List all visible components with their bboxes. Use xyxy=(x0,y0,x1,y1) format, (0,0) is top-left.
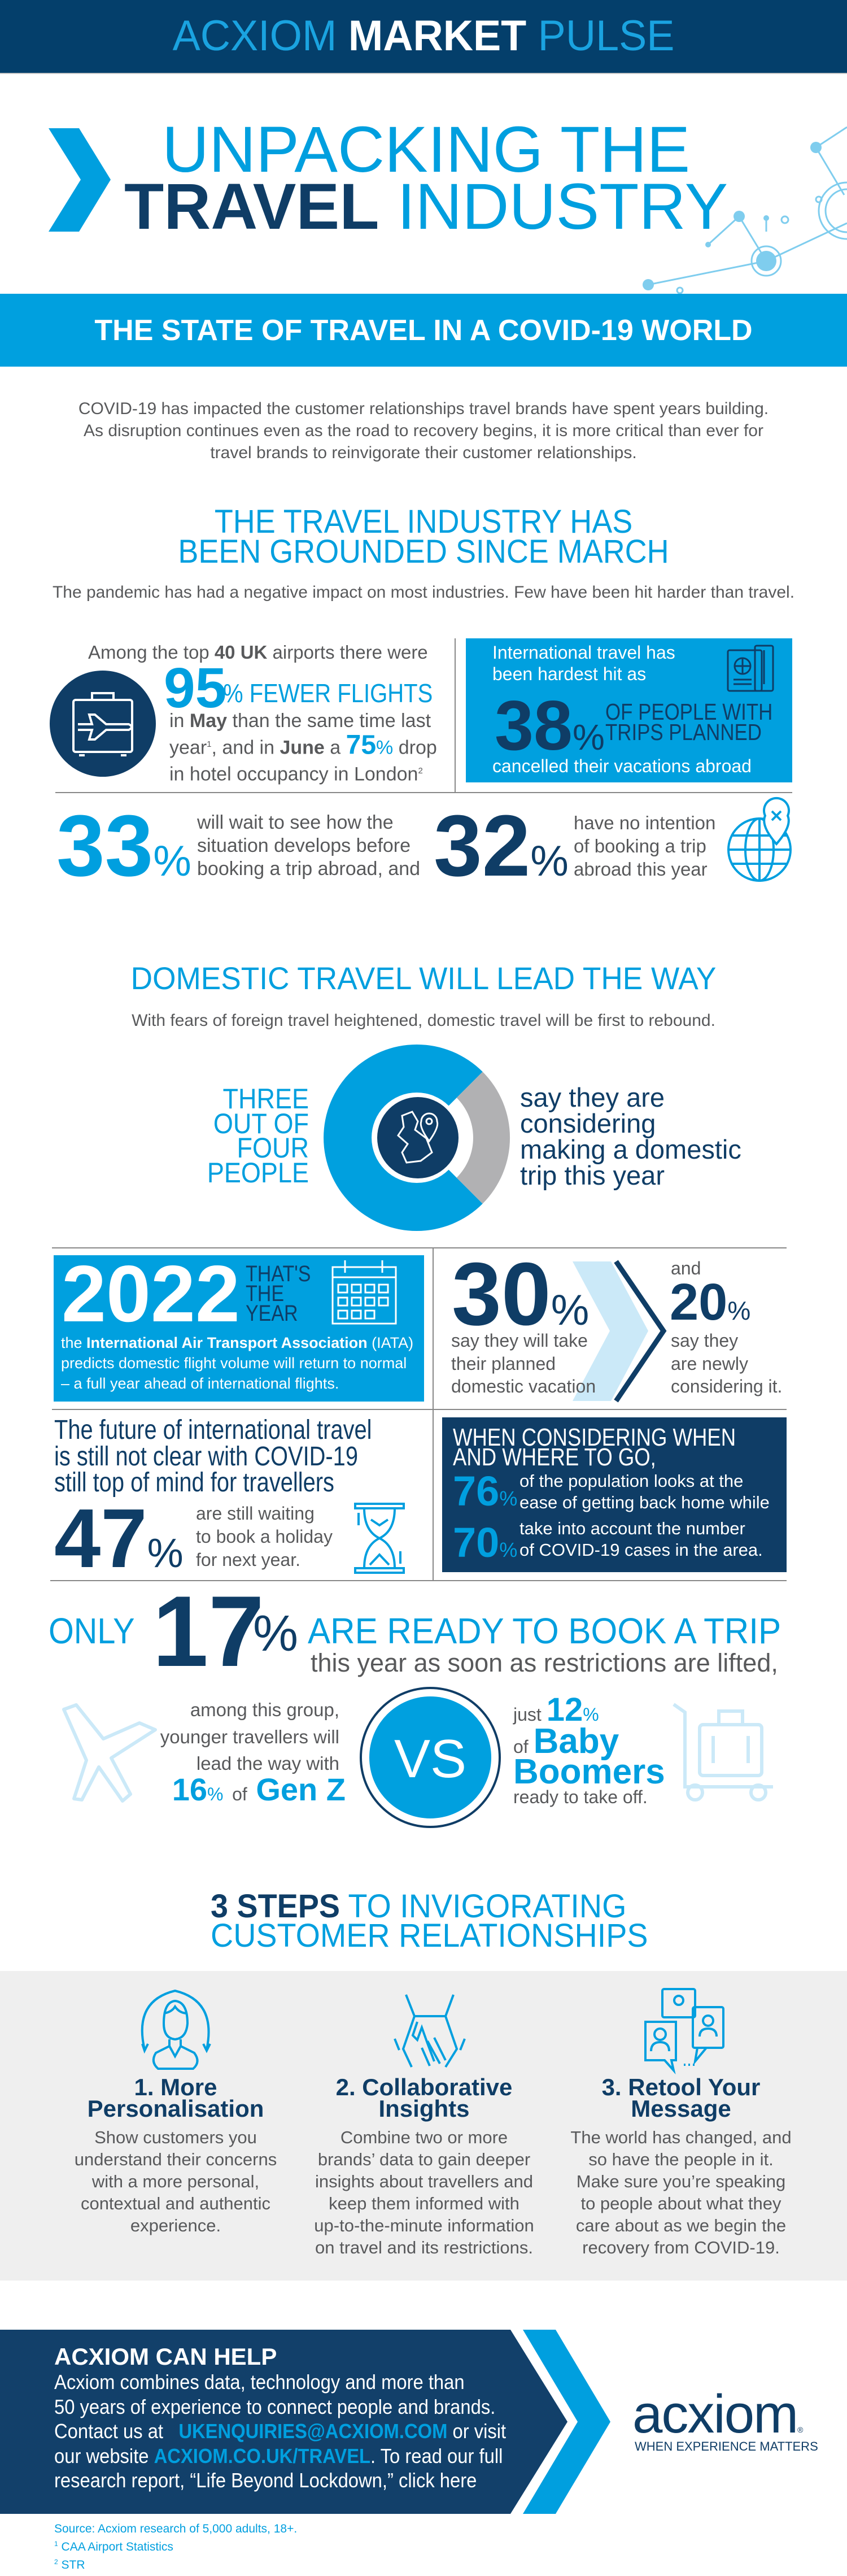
stat: 33% xyxy=(56,797,420,894)
text: newly considering: considering it. xyxy=(671,1376,782,1396)
main title xyxy=(124,114,728,243)
stat: 33%: booking a trip abroad, and xyxy=(197,858,420,880)
text: contact: Acxiom combines data, technology and more than xyxy=(54,2370,465,2394)
step 2: brands’ data to gain deeper xyxy=(318,2149,530,2169)
text: 16% of Gen Z xyxy=(172,1772,346,1807)
stat: 47%: for next year. xyxy=(196,1550,300,1570)
text: IATA xyxy=(61,1334,413,1392)
text: that's the year xyxy=(246,1261,311,1326)
panel: acxiom can help xyxy=(0,2330,621,2514)
step 3: The world has changed, and xyxy=(570,2127,792,2147)
text: baby boomers xyxy=(513,1691,665,1807)
text: contact: 50 years of experience to connect people and brands. xyxy=(54,2395,495,2418)
text: three out of four people: FOUR xyxy=(237,1132,309,1164)
divider vertical xyxy=(433,1248,434,1581)
text: planned vacation: their planned xyxy=(451,1354,556,1374)
heading: grounded xyxy=(178,503,669,570)
text: three out of four people xyxy=(207,1083,309,1189)
stat: 33%: will wait to see how the xyxy=(197,812,394,833)
panel: when considering xyxy=(442,1417,787,1572)
subtitle domestic: With fears of foreign travel heightened, domestic travel will be first to rebound. xyxy=(132,1011,715,1030)
text: cancelled: cancelled their vacations abroad xyxy=(492,756,752,776)
panel: flights stat: % FEWER FLIGHTS xyxy=(223,678,433,708)
stat: and 20%: and xyxy=(671,1258,701,1278)
text: IATA: – a full year ahead of international flights. xyxy=(61,1375,339,1392)
text: baby boomers: ready to take off. xyxy=(513,1787,648,1807)
stat: 32%: of booking a trip xyxy=(574,836,706,856)
stat: 47% xyxy=(54,1492,405,1585)
header title: ACXIOM MARKET PULSE xyxy=(173,12,674,60)
divider xyxy=(50,1580,787,1581)
stat: 95% fewer flights: 95 xyxy=(164,656,226,720)
footnotes: Source: Acxiom research of 5,000 adults, 18+. xyxy=(54,2522,297,2535)
step 3: to people about what they xyxy=(580,2194,781,2213)
text: contact: our website ACXIOM.CO.UK/TRAVEL. To read our full xyxy=(54,2444,503,2468)
step 3: Message xyxy=(631,2095,731,2122)
step 3 xyxy=(568,2077,794,2259)
step 2: insights about travellers and xyxy=(315,2172,533,2191)
stat: 70%: 70% xyxy=(453,1519,517,1566)
intro text: travel brands to reinvigorate their customer relationships. xyxy=(210,443,637,462)
icon: globe pin xyxy=(727,797,792,882)
step 1: experience. xyxy=(130,2216,221,2235)
divider xyxy=(52,1247,787,1248)
text: considering domestic trip: trip this year xyxy=(520,1160,665,1190)
divider vertical xyxy=(455,638,456,793)
text: younger travellers gen z: younger travellers will xyxy=(160,1726,339,1747)
stat: 32% xyxy=(434,797,792,894)
icon: luggage trolley xyxy=(673,1703,773,1802)
step 1: understand their concerns xyxy=(75,2149,277,2169)
text: planned vacation xyxy=(451,1330,596,1396)
text: that's the year: YEAR xyxy=(246,1301,298,1326)
headline: only 17%: this year as soon as restrictions are lifted, xyxy=(311,1648,778,1677)
step 2: on travel and its restrictions. xyxy=(315,2238,533,2257)
text: contact: research report, “Life Beyond Lockdown,” click here xyxy=(54,2469,477,2492)
text: planned vacation: domestic vacation xyxy=(451,1376,596,1396)
text: among top airports: Among the top 40 UK airports there were xyxy=(88,642,428,663)
stat: 32%: 32% xyxy=(434,797,569,894)
text: planned vacation: say they will take xyxy=(451,1330,588,1351)
headline: only 17%: ONLY xyxy=(49,1611,135,1651)
main title: TRAVEL INDUSTRY xyxy=(124,171,728,243)
text: may june: in May than the same time last xyxy=(169,710,431,732)
stat: 47%: to book a holiday xyxy=(196,1526,333,1547)
text: considering domestic trip: considering xyxy=(520,1108,656,1138)
stat: 76%: 76% xyxy=(453,1468,517,1515)
text: of people with trips planned: OF PEOPLE WITH xyxy=(605,699,772,725)
step 2: Insights xyxy=(378,2095,470,2122)
icon: calendar xyxy=(332,1260,396,1324)
panel: when considering: take into account the number xyxy=(519,1518,745,1538)
divider xyxy=(52,1409,787,1410)
intro text: As disruption continues even as the road to recovery begins, it is more critical than ever for xyxy=(84,421,763,440)
icon: chevron light xyxy=(573,1260,666,1402)
section band: state of travel: THE STATE OF TRAVEL IN A COVID-19 WORLD xyxy=(94,314,753,347)
step 2 xyxy=(311,2077,537,2259)
panel: 30% and 20% xyxy=(451,1245,782,1402)
heading: grounded: THE TRAVEL INDUSTRY HAS xyxy=(215,503,632,540)
text: IATA: predicts domestic flight volume will return to normal xyxy=(61,1355,407,1372)
text: baby boomers: Boomers xyxy=(513,1752,665,1791)
text: newly considering xyxy=(671,1330,782,1396)
text: considering domestic trip: say they are xyxy=(520,1082,665,1112)
text: may june: year1, and in June a 75% drop xyxy=(169,730,437,760)
text: considering domestic trip: making a domestic xyxy=(520,1134,741,1164)
text: newly considering: say they xyxy=(671,1330,738,1351)
step 3: recovery from COVID-19. xyxy=(582,2238,780,2257)
text: three out of four people: OUT OF xyxy=(213,1107,309,1139)
stat: 32%: have no intention xyxy=(574,812,715,833)
step 2: Combine two or more xyxy=(340,2127,508,2147)
heading: 3 steps: CUSTOMER RELATIONSHIPS xyxy=(211,1917,648,1954)
step 3: so have the people in it. xyxy=(588,2149,774,2169)
icon: retool message xyxy=(643,1988,725,2073)
divider xyxy=(55,792,792,793)
subtitle grounded: The pandemic has had a negative impact on most industries. Few have been hit harder than travel. xyxy=(53,583,794,602)
panel: when considering: ease of getting back home while xyxy=(519,1492,770,1512)
step 1: with a more personal, xyxy=(92,2172,259,2191)
stat: 47%: 47% xyxy=(54,1492,184,1585)
headline: only 17%: ARE READY TO BOOK A TRIP xyxy=(308,1611,781,1651)
text: future of international travel xyxy=(54,1415,372,1498)
stat: 38%: 38% xyxy=(495,687,605,765)
panel: when considering: AND WHERE TO GO, xyxy=(453,1443,656,1471)
heading: 3 steps: 3 STEPS TO INVIGORATING xyxy=(211,1888,626,1925)
heading: grounded: BEEN GROUNDED SINCE MARCH xyxy=(178,533,669,570)
step 2: 2. Collaborative xyxy=(336,2074,512,2100)
icon: handshake xyxy=(389,1994,469,2067)
panel: 3 steps xyxy=(0,1971,847,2281)
heading: 3 steps xyxy=(211,1888,648,1954)
icon: hourglass xyxy=(354,1503,405,1574)
text: younger travellers gen z xyxy=(160,1699,339,1774)
panel: when considering: of the population looks at the xyxy=(519,1471,743,1491)
stat: 2022: 2022 xyxy=(62,1249,240,1339)
panel: flights stat xyxy=(50,642,437,785)
text: baby boomers: of Baby xyxy=(513,1722,619,1761)
vs circle: VS xyxy=(394,1729,466,1789)
text: IATA: the International Air Transport Association (IATA) xyxy=(61,1334,413,1351)
text: future of international travel: still top of mind for travellers xyxy=(54,1468,334,1498)
step 1 xyxy=(63,2077,289,2236)
logo: acxiom: acxiom® xyxy=(632,2384,802,2444)
step 3: 3. Retool Your xyxy=(602,2074,760,2100)
text: future of international travel: is still not clear with COVID-19 xyxy=(54,1442,358,1471)
donut chart: three out of four xyxy=(324,1045,510,1231)
text: may june: in hotel occupancy in London2 xyxy=(169,764,423,785)
vs circle xyxy=(360,1687,501,1828)
stat: 33%: 33% xyxy=(56,797,191,894)
intro text xyxy=(78,399,769,462)
text: that's the year: THAT'S xyxy=(246,1261,311,1286)
text: younger travellers gen z: among this group, xyxy=(190,1699,339,1720)
step 2: up-to-the-minute information xyxy=(314,2216,534,2235)
text: of people with trips planned xyxy=(605,699,772,745)
panel: 2022 xyxy=(54,1255,424,1402)
text: baby boomers: just 12% xyxy=(513,1691,599,1728)
icon: passport xyxy=(727,645,774,691)
text: considering domestic trip xyxy=(520,1082,741,1190)
text: hardest hit xyxy=(492,642,675,684)
intro text: COVID-19 has impacted the customer relationships travel brands have spent years building. xyxy=(78,399,769,418)
network graphic xyxy=(643,127,847,294)
step 1: contextual and authentic xyxy=(81,2194,270,2213)
text: younger travellers gen z: lead the way with xyxy=(197,1753,339,1774)
step 1: 1. More xyxy=(134,2074,217,2100)
text: contact xyxy=(54,2370,506,2492)
text: of people with trips planned: TRIPS PLANNED xyxy=(605,719,762,745)
text: hardest hit: International travel has xyxy=(492,642,675,663)
text: hardest hit: been hardest hit as xyxy=(492,664,646,684)
text: newly considering: are newly xyxy=(671,1354,748,1374)
panel: when considering: of COVID-19 cases in the area. xyxy=(519,1540,763,1560)
step 1: Personalisation xyxy=(88,2095,264,2122)
step 2: keep them informed with xyxy=(329,2194,519,2213)
text: future of international travel: The future of international travel xyxy=(54,1415,372,1445)
icon: plane light xyxy=(62,1703,157,1803)
icon: personalisation xyxy=(138,1990,215,2070)
section band: state of travel xyxy=(0,294,847,367)
step 3: Make sure you’re speaking xyxy=(577,2172,785,2191)
step 3: care about as we begin the xyxy=(576,2216,786,2235)
stat: 47%: are still waiting xyxy=(196,1503,315,1524)
headline: only 17%: 17 xyxy=(152,1575,264,1687)
text: may june xyxy=(169,710,437,785)
stat: 33%: situation develops before xyxy=(197,835,411,856)
stat: 30%: 30% xyxy=(452,1245,589,1344)
text: three out of four people: THREE xyxy=(222,1083,309,1115)
headline: only 17% xyxy=(49,1575,781,1687)
panel: when considering: WHEN CONSIDERING WHEN xyxy=(453,1424,736,1451)
icon: suitcase plane xyxy=(50,671,156,777)
text: three out of four people: PEOPLE xyxy=(207,1157,309,1189)
step 1: Show customers you xyxy=(94,2127,257,2147)
footnotes xyxy=(54,2522,297,2573)
header bar xyxy=(0,0,847,74)
logo: acxiom: WHEN EXPERIENCE MATTERS xyxy=(635,2439,818,2453)
panel: 30% and 20%: 20% xyxy=(670,1273,750,1331)
panel: international travel xyxy=(466,638,792,782)
text: that's the year: THE xyxy=(246,1281,284,1306)
footnotes: 2 STR xyxy=(54,2558,85,2571)
main title: UNPACKING THE xyxy=(162,114,690,186)
text: contact: Contact us at UKENQUIRIES@ACXIOM.COM or visit xyxy=(54,2420,506,2443)
chevron icon xyxy=(49,128,111,232)
headline: only 17%: % xyxy=(253,1605,298,1662)
footnotes: 1 CAA Airport Statistics xyxy=(54,2540,173,2553)
heading: domestic travel: DOMESTIC TRAVEL WILL LEAD THE WAY xyxy=(131,960,716,996)
stat: 32%: abroad this year xyxy=(574,859,708,880)
heading: acxiom can help: ACXIOM CAN HELP xyxy=(54,2343,277,2370)
